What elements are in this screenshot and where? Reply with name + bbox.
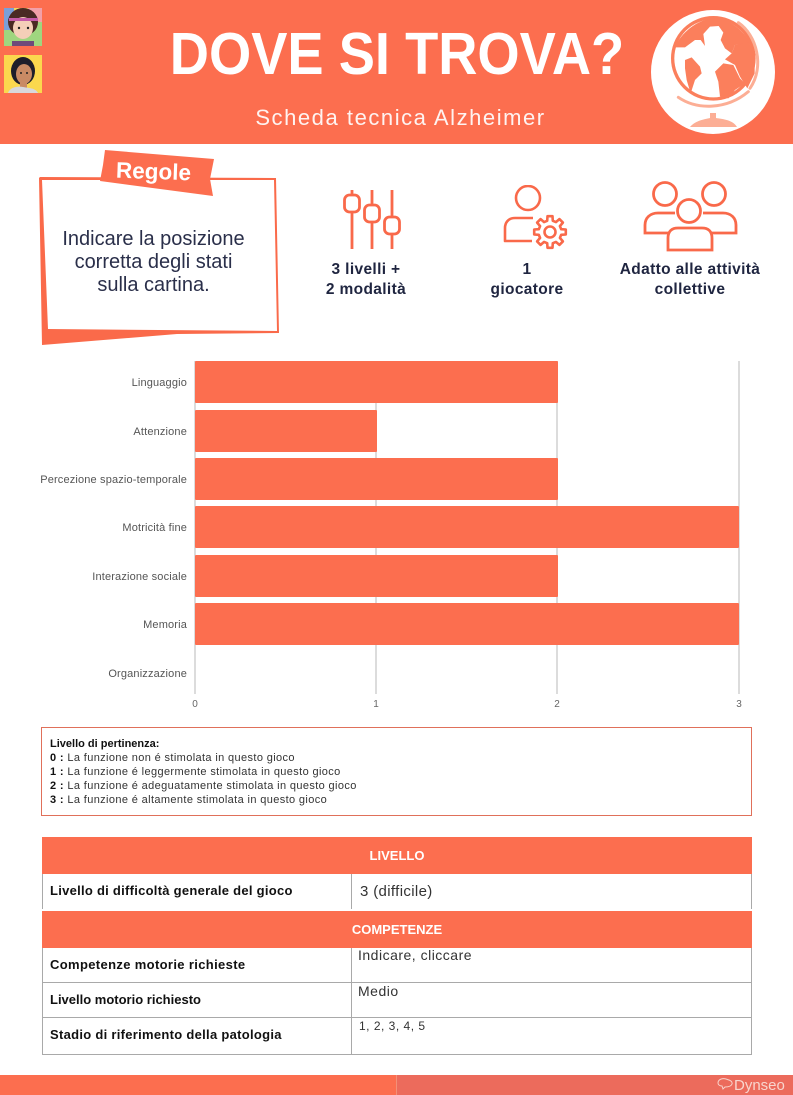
rules label: [100, 150, 214, 196]
bar: Percezione: [195, 458, 558, 500]
icon: globe: [651, 10, 775, 134]
header band: [0, 0, 793, 144]
rules text: sulla cartina.: [97, 274, 210, 296]
table header: livello: [42, 837, 752, 874]
label: Adatto alle attività: [620, 261, 760, 278]
category labels: Motricità fine: [122, 522, 187, 534]
table header: livello: LIVELLO: [370, 848, 424, 863]
panel frame: [39, 177, 279, 345]
row: difficulty: 3 (difficile): [360, 883, 433, 900]
label: collettive: [655, 281, 725, 298]
legend box: 2 : La funzione é adeguatamente stimolata in questo gioco: [50, 780, 357, 792]
bar: Attenzione: [195, 410, 377, 452]
category labels: Organizzazione: [108, 668, 187, 680]
bar: Memoria: [195, 603, 739, 645]
feature: levels: [326, 190, 406, 298]
category labels: Linguaggio: [132, 377, 187, 389]
rules text: [62, 228, 245, 296]
bar chart: [40, 361, 742, 710]
axis ticks: 2: [554, 699, 560, 710]
bar: Motricità fine: [195, 506, 739, 548]
table: [42, 837, 752, 1055]
row: motor level: Livello motorio richiesto: [50, 992, 201, 1007]
label: 2 modalità: [326, 281, 406, 298]
rules text: Indicare la posizione: [62, 228, 245, 250]
label: giocatore: [491, 281, 563, 298]
row: motor skills: [50, 947, 472, 972]
category labels: Interazione sociale: [92, 571, 187, 583]
row: motor skills: Indicare, cliccare: [358, 947, 472, 963]
label: 3 livelli +: [332, 261, 400, 278]
row: stage: 1, 2, 3, 4, 5: [359, 1019, 426, 1033]
axis ticks: 1: [373, 699, 379, 710]
category labels: Memoria: [143, 619, 187, 631]
row: motor level: Medio: [358, 983, 399, 999]
row: motor skills: Competenze motorie richieste: [50, 957, 245, 972]
category labels: Percezione spazio-temporale: [40, 474, 187, 486]
axis ticks: 3: [736, 699, 742, 710]
table header: competenze: [42, 911, 752, 948]
row: stage: [50, 1019, 426, 1042]
axis ticks: 0: [192, 699, 198, 710]
icon: avatar man: [4, 55, 42, 93]
feature: players: [491, 185, 568, 298]
legend box: 0 : La funzione non é stimolata in questo gioco: [50, 752, 295, 764]
row: motor level: [50, 983, 399, 1007]
row: stage: Stadio di riferimento della patologia: [50, 1027, 282, 1042]
icon: user with gear: [504, 185, 568, 250]
footer band: [0, 1075, 793, 1095]
legend box: 3 : La funzione é altamente stimolata in questo gioco: [50, 794, 327, 806]
legend box: 1 : La funzione é leggermente stimolata in questo gioco: [50, 766, 341, 778]
feature: group: [620, 181, 760, 298]
rules text: corretta degli stati: [75, 251, 232, 273]
legend box: [41, 727, 752, 816]
rules label: Regole: [116, 158, 191, 185]
row: difficulty: Livello di difficoltà generale del gioco: [50, 883, 293, 898]
title: DOVE SI TROVA?: [170, 21, 624, 87]
table header: competenze: COMPETENZE: [352, 922, 442, 937]
brand logo: Dynseo: [734, 1077, 785, 1094]
panel: rules: [39, 150, 279, 345]
category labels: Attenzione: [133, 426, 187, 438]
icon: avatar woman: [4, 8, 42, 46]
bar: Interazione sociale: [195, 555, 558, 597]
label: [326, 261, 406, 298]
label: 1: [522, 261, 531, 278]
icon: three people: [644, 181, 738, 252]
category labels: [40, 377, 187, 680]
legend box: Livello di pertinenza:: [50, 738, 159, 750]
axis ticks: [192, 699, 742, 710]
icon: sliders: [343, 190, 401, 249]
subtitle: Scheda tecnica Alzheimer: [255, 105, 546, 130]
footer right segment: [396, 1075, 793, 1095]
bar: Linguaggio: [195, 361, 558, 403]
label: [620, 261, 760, 298]
label: [491, 261, 563, 298]
row: difficulty: [50, 883, 433, 900]
